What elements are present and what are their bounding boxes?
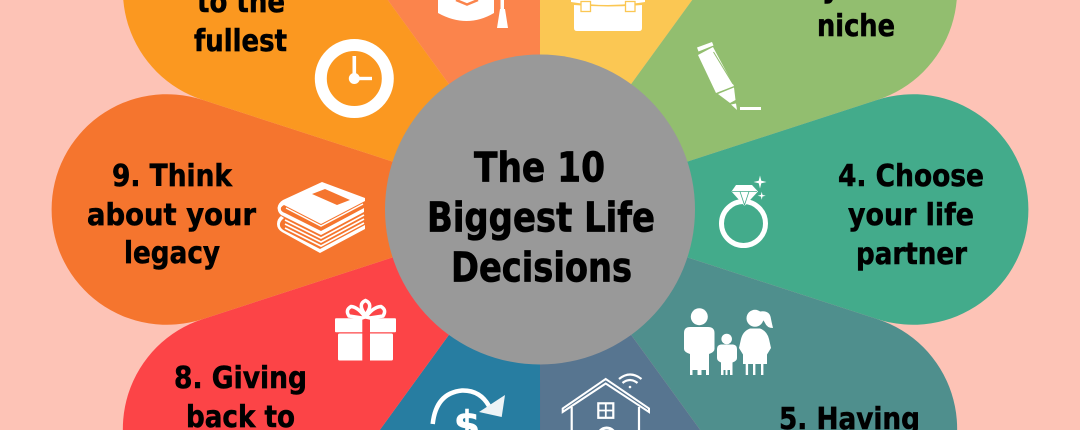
petal 1: education [279,0,650,245]
icon: clock [321,45,388,112]
icon: briefcase [571,0,645,31]
label: choose your life partner: your life [848,198,974,233]
petal 2: career [430,0,801,245]
label: to the fullest: fullest [194,24,287,59]
icon: marker pen [697,42,761,110]
label: think about your legacy: legacy [124,236,220,271]
title [427,144,655,292]
icon: family [684,308,773,375]
label: choose your life partner: partner [856,237,967,272]
label: think about your legacy [87,159,256,271]
petal 10: live to the fullest [77,0,608,303]
label: think about your legacy: 9. Think [112,159,233,194]
label: choose your life partner [838,159,984,272]
petal 5: having children [472,116,1003,430]
label: choose your life partner: 4. Choose [838,159,984,194]
title: Decisions [451,244,632,292]
label: giving back to: 8. Giving [174,361,307,396]
petal 8: giving back [77,116,608,430]
icon: gift box [335,300,396,361]
label: to the fullest [194,0,287,59]
label: niche: niche [817,9,895,44]
petal 9: legacy [52,94,540,325]
icon: dollar with arrow [433,390,505,430]
petal 3: niche [472,0,1003,303]
petal 6: home [430,174,801,430]
label: think about your legacy: about your [87,198,256,233]
label: giving back to [174,361,307,430]
icon: books [277,182,365,253]
title: The 10 [474,144,605,192]
petal 7: money [279,174,650,430]
center circle [385,54,695,364]
icon: smart house [563,374,649,430]
petal 4: life partner [540,94,1028,325]
title: Biggest Life [427,194,655,242]
icon: diamond ring [722,176,766,246]
icon: graduation cap [438,0,508,28]
